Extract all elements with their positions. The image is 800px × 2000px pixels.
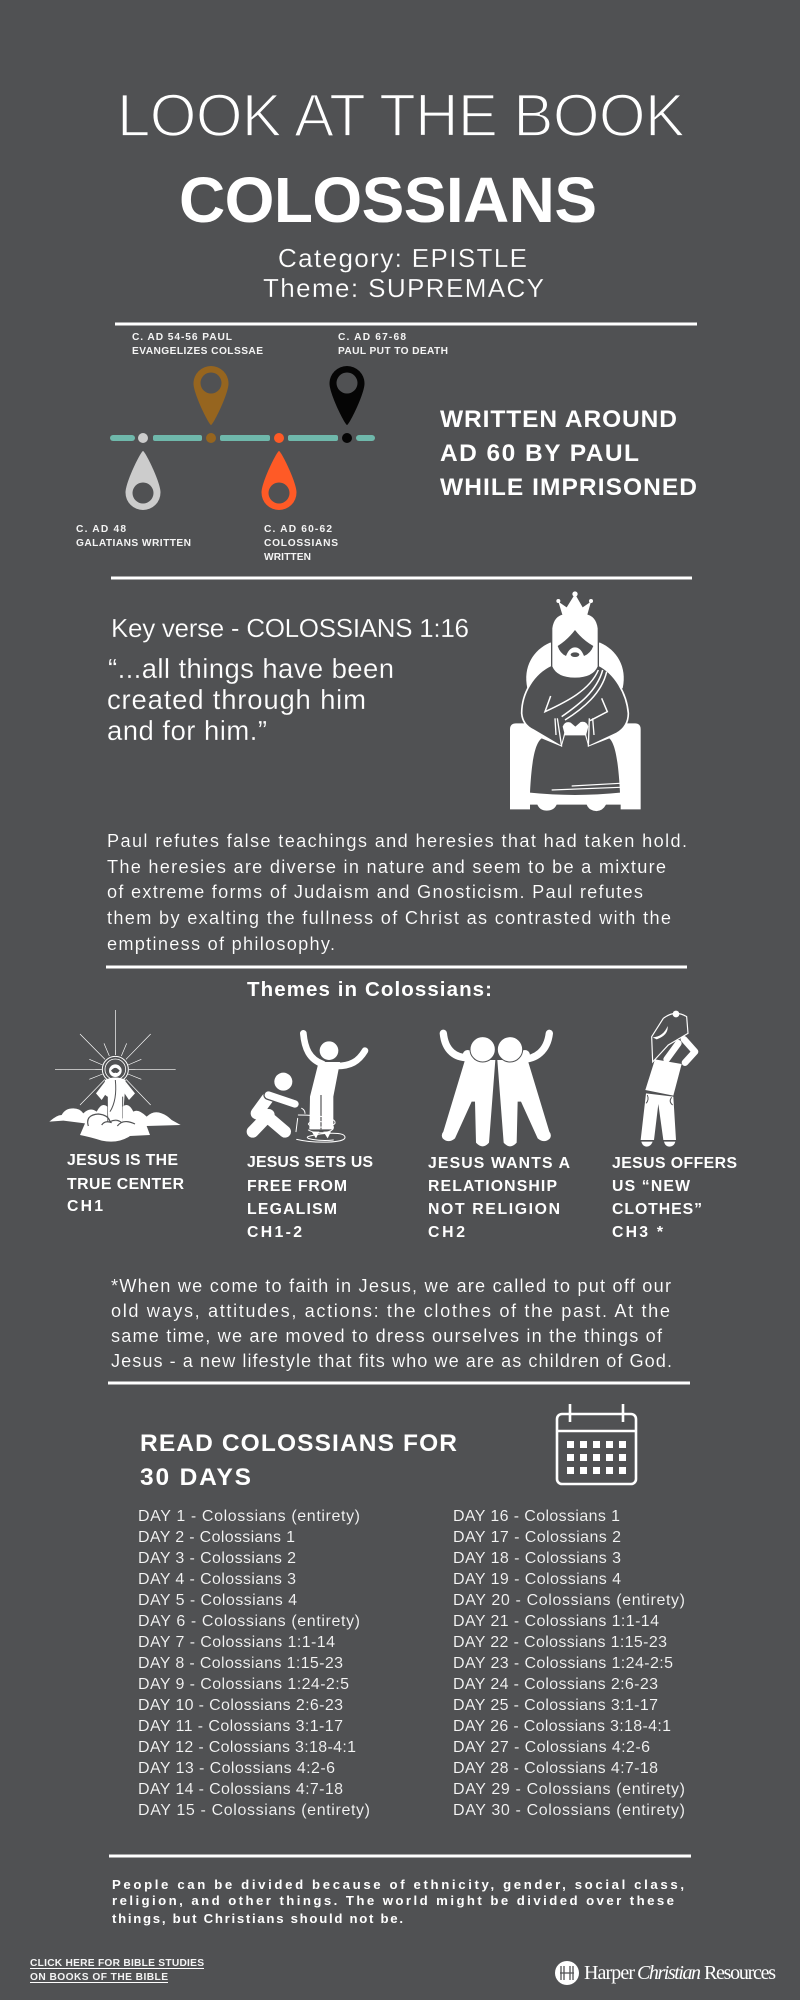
theme 1 label [67, 1152, 185, 1215]
theme 2 label: LEGALISM [247, 1201, 337, 1218]
icon: freed from ropes [253, 1033, 365, 1142]
footnote: new clothes: same time, we are moved to dress ourselves in the things of [111, 1326, 663, 1346]
closing statement: religion, and other things. The world might be divided over these [112, 1893, 674, 1908]
paragraph: false teachings: Paul refutes false teachings and heresies that had taken hold. [107, 831, 687, 851]
reading list: days 1-15: DAY 8 - Colossians 1:15-23 [138, 1655, 343, 1672]
written around callout: AD 60 BY PAUL [440, 440, 639, 467]
label: colossians written: WRITTEN [264, 552, 311, 563]
label: death: PAUL PUT TO DEATH [338, 346, 448, 357]
theme 4 label [612, 1155, 737, 1241]
theme 3 label: JESUS WANTS A [428, 1155, 570, 1172]
closing statement [112, 1877, 684, 1926]
reading list: days 1-15 [138, 1508, 370, 1819]
reading list: days 1-15: DAY 4 - Colossians 3 [138, 1571, 296, 1588]
reading list: days 16-30: DAY 24 - Colossians 2:6-23 [453, 1676, 658, 1693]
theme 2 label [247, 1154, 373, 1241]
pin: orange [262, 451, 296, 510]
footnote: new clothes: *When we come to faith in Jesus, we are called to put off our [111, 1276, 671, 1296]
key verse [107, 613, 469, 746]
reading list: days 16-30: DAY 30 - Colossians (entirety) [453, 1802, 685, 1819]
written around callout: WHILE IMPRISONED [440, 474, 697, 501]
panel: theme 4 [612, 1011, 737, 1241]
theme 4 label: CH3 * [612, 1224, 664, 1241]
theme 2 label: JESUS SETS US [247, 1154, 373, 1171]
label: colossians written [264, 524, 338, 563]
theme 4 label: JESUS OFFERS [612, 1155, 737, 1172]
reading list: days 1-15: DAY 2 - Colossians 1 [138, 1529, 295, 1546]
logo wordmark [584, 1962, 776, 1984]
reading list: days 16-30: DAY 28 - Colossians 4:7-18 [453, 1760, 658, 1777]
theme 1 label: CH1 [67, 1198, 103, 1215]
reading list: days 1-15: DAY 15 - Colossians (entirety) [138, 1802, 370, 1819]
reading list: days 16-30: DAY 19 - Colossians 4 [453, 1571, 621, 1588]
reading list: days 1-15: DAY 11 - Colossians 3:1-17 [138, 1718, 343, 1735]
theme 3 label [428, 1155, 570, 1241]
paragraph: false teachings: of extreme forms of Judaism and Gnosticism. Paul refutes [107, 882, 643, 902]
reading list: days 16-30: DAY 29 - Colossians (entirety) [453, 1781, 685, 1798]
reading list: days 16-30: DAY 17 - Colossians 2 [453, 1529, 621, 1546]
reading list: days 1-15: DAY 14 - Colossians 4:7-18 [138, 1781, 343, 1798]
paragraph: false teachings: The heresies are diverse in nature and seem to be a mixture [107, 857, 666, 877]
theme 3 label: CH2 [428, 1224, 465, 1241]
key verse: Key verse - COLOSSIANS 1:16 [111, 613, 469, 643]
label: death: C. AD 67-68 [338, 332, 406, 343]
reading list: days 16-30: DAY 21 - Colossians 1:1-14 [453, 1613, 659, 1630]
footnote: new clothes: old ways, attitudes, actions: the clothes of the past. At the [111, 1301, 670, 1321]
category: Category: EPISTLE [278, 243, 527, 273]
link: bible studies [30, 1958, 204, 1983]
reading list: days 1-15: DAY 10 - Colossians 2:6-23 [138, 1697, 343, 1714]
logo: HarperChristian Resources [555, 1961, 776, 1985]
reading list: days 16-30: DAY 26 - Colossians 3:18-4:1 [453, 1718, 671, 1735]
link: bible studies: CLICK HERE FOR BIBLE STUDIES [30, 1958, 204, 1969]
written around callout [440, 406, 697, 501]
icon: calendar [557, 1404, 636, 1484]
link: bible studies: ON BOOKS OF THE BIBLE [30, 1972, 168, 1983]
timeline dots [138, 433, 352, 443]
reading list: days 16-30: DAY 20 - Colossians (entirety) [453, 1592, 685, 1609]
title [117, 82, 685, 303]
pin: brown [194, 366, 228, 425]
reading list: days 1-15: DAY 12 - Colossians 3:18-4:1 [138, 1739, 356, 1756]
paragraph: false teachings: emptiness of philosophy. [107, 934, 335, 954]
reading list: days 1-15: DAY 1 - Colossians (entirety) [138, 1508, 360, 1525]
timeline [76, 332, 448, 563]
label: evangelizes [132, 332, 263, 357]
theme 2 label: FREE FROM [247, 1178, 347, 1195]
logo wordmark: Harper [584, 1962, 635, 1984]
reading list: days 16-30: DAY 23 - Colossians 1:24-2:5 [453, 1655, 673, 1672]
panel: theme 2 [247, 1033, 373, 1241]
label: galatians: C. AD 48 [76, 524, 126, 535]
label: galatians [76, 524, 191, 549]
icon: enthroned king [510, 591, 641, 811]
reading list: days 1-15: DAY 6 - Colossians (entirety) [138, 1613, 360, 1630]
theme 3 label: NOT RELIGION [428, 1201, 560, 1218]
heading: read for 30 days: READ COLOSSIANS FOR [140, 1430, 457, 1457]
label: evangelizes: EVANGELIZES COLSSAE [132, 346, 263, 357]
reading list: days 1-15: DAY 9 - Colossians 1:24-2:5 [138, 1676, 349, 1693]
title: LOOK AT THE BOOK [117, 82, 685, 149]
quote [107, 653, 394, 746]
label: colossians written: COLOSSIANS [264, 538, 338, 549]
reading list: days 16-30: DAY 18 - Colossians 3 [453, 1550, 621, 1567]
heading: themes: Themes in Colossians: [247, 978, 492, 1001]
logo mark [555, 1961, 579, 1985]
panel: theme 1 [49, 1010, 185, 1215]
reading list: days 1-15: DAY 3 - Colossians 2 [138, 1550, 296, 1567]
closing statement: People can be divided because of ethnicity, gender, social class, [112, 1877, 684, 1892]
book name: COLOSSIANS [179, 164, 597, 236]
logo wordmark: Christian [637, 1962, 701, 1984]
reading list: days 1-15: DAY 7 - Colossians 1:1-14 [138, 1634, 335, 1651]
icon: changing clothes [641, 1011, 695, 1147]
pin: black [330, 366, 364, 425]
label: evangelizes: C. AD 54-56 PAUL [132, 332, 232, 343]
reading list: days 16-30: DAY 27 - Colossians 4:2-6 [453, 1739, 650, 1756]
label: death [338, 332, 448, 357]
logo wordmark: Resources [704, 1962, 776, 1984]
icon: jesus in clouds [49, 1010, 181, 1142]
heading: read for 30 days: 30 DAYS [140, 1464, 251, 1491]
quote: “...all things have been [108, 653, 394, 684]
reading list: days 1-15: DAY 5 - Colossians 4 [138, 1592, 297, 1609]
theme: Theme: SUPREMACY [263, 273, 544, 303]
theme 4 label: CLOTHES” [612, 1201, 702, 1218]
written around callout: WRITTEN AROUND [440, 406, 677, 433]
reading list: days 16-30: DAY 25 - Colossians 3:1-17 [453, 1697, 658, 1714]
label: colossians written: C. AD 60-62 [264, 524, 332, 535]
theme 3 label: RELATIONSHIP [428, 1178, 557, 1195]
theme 2 label: CH1-2 [247, 1224, 302, 1241]
reading list: days 16-30: DAY 22 - Colossians 1:15-23 [453, 1634, 667, 1651]
paragraph: false teachings [107, 831, 687, 954]
theme 1 label: TRUE CENTER [67, 1176, 185, 1193]
label: galatians: GALATIANS WRITTEN [76, 538, 191, 549]
panel: theme 3 [428, 1033, 570, 1241]
reading list: days 16-30: DAY 16 - Colossians 1 [453, 1508, 620, 1525]
closing statement: things, but Christians should not be. [112, 1911, 403, 1926]
heading: read for 30 days [140, 1430, 457, 1491]
footnote: new clothes [111, 1276, 672, 1371]
quote: created through him [107, 684, 366, 715]
footnote: new clothes: Jesus - a new lifestyle that fits who we are as children of God. [111, 1351, 672, 1371]
theme 1 label: JESUS IS THE [67, 1152, 178, 1169]
reading list: days 1-15: DAY 13 - Colossians 4:2-6 [138, 1760, 335, 1777]
pin: grey [126, 451, 160, 510]
reading list: days 16-30 [453, 1508, 685, 1819]
icon: two friends [442, 1033, 551, 1146]
timeline bar [110, 435, 375, 441]
paragraph: false teachings: them by exalting the fullness of Christ as contrasted with the [107, 908, 671, 928]
quote: and for him.” [107, 715, 267, 746]
theme 4 label: US “NEW [612, 1178, 690, 1195]
